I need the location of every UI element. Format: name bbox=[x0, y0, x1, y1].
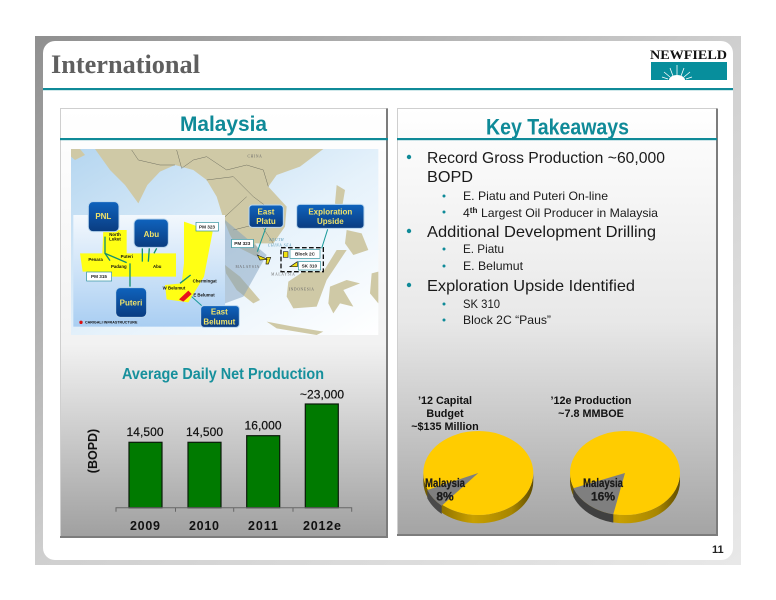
chart title: Average Daily Net Production bbox=[122, 366, 324, 383]
slice label: 8% bbox=[436, 490, 454, 504]
bars bbox=[129, 404, 338, 508]
callout buttons bbox=[88, 202, 364, 327]
block labels bbox=[87, 222, 321, 281]
bullet list: BOPD bbox=[427, 169, 473, 186]
pie title bbox=[550, 395, 632, 420]
inset map: Abu bbox=[153, 264, 162, 269]
inset map: Penara bbox=[88, 257, 103, 262]
map labels bbox=[236, 154, 315, 291]
bullet list: Block 2C “Paus” bbox=[463, 313, 551, 327]
pie chart: production bbox=[550, 395, 680, 523]
inset map: CARIGALI INFRASTRUCTURE bbox=[85, 320, 138, 324]
country borders bbox=[132, 150, 273, 243]
inset map: North bbox=[109, 232, 121, 237]
logo: Newfield: NEWFIELD bbox=[650, 48, 727, 62]
inset map: Chermingat bbox=[193, 279, 217, 284]
bullet list: th bbox=[470, 206, 478, 215]
axis label: (BOPD) bbox=[86, 429, 100, 473]
map: Southeast Asia assets: Abu bbox=[144, 230, 159, 239]
map: Southeast Asia assets: Upside bbox=[317, 217, 344, 226]
map: Southeast Asia assets: Belumut bbox=[203, 317, 236, 326]
bar chart: production bbox=[86, 388, 352, 533]
bullet list: Exploration Upside Identified bbox=[427, 278, 635, 295]
year labels: 2009 bbox=[130, 519, 160, 533]
bullet list: 4 bbox=[463, 206, 470, 220]
bullet list bbox=[407, 150, 665, 327]
year labels bbox=[130, 519, 341, 533]
pie title: Budget bbox=[426, 408, 464, 420]
bullet list: E. Belumut bbox=[463, 259, 524, 273]
block labels: PM 315 bbox=[91, 274, 107, 279]
map labels: INDONESIA bbox=[289, 287, 315, 291]
map: Southeast Asia assets: Exploration bbox=[308, 208, 352, 217]
year labels: 2012e bbox=[303, 519, 341, 533]
map labels: CHINA bbox=[248, 154, 262, 158]
inset map: W Belumut bbox=[163, 285, 186, 290]
panel: Malaysia bbox=[60, 108, 388, 537]
map: Southeast Asia assets: East bbox=[211, 308, 228, 317]
bullet list: Additional Development Drilling bbox=[427, 224, 656, 241]
slice label bbox=[425, 476, 465, 504]
block labels: PM 323 bbox=[234, 241, 251, 246]
heading: Key Takeaways: Key Takeaways bbox=[486, 114, 629, 140]
inset map: E Belumut bbox=[193, 292, 215, 297]
pie chart: capital budget bbox=[411, 395, 533, 523]
value labels: 16,000 bbox=[244, 418, 282, 432]
map: Southeast Asia assets bbox=[71, 149, 378, 335]
heading: Malaysia: Malaysia bbox=[180, 113, 267, 136]
right-hand assets bbox=[192, 227, 328, 306]
pie title: ~7.8 MMBOE bbox=[558, 408, 624, 420]
value labels: 14,500 bbox=[126, 425, 164, 439]
block labels: Block 2C bbox=[295, 252, 316, 257]
bullet list: Record Gross Production ~60,000 bbox=[427, 150, 665, 167]
header rule bbox=[43, 88, 733, 90]
year labels: 2010 bbox=[189, 519, 219, 533]
slice label: Malaysia bbox=[425, 476, 465, 490]
inset map: Lukut bbox=[109, 237, 121, 242]
bullet list: E. Piatu and Puteri On-line bbox=[463, 189, 608, 203]
value labels: ~23,000 bbox=[300, 388, 344, 402]
map: Southeast Asia assets: PNL bbox=[95, 212, 111, 221]
map: Southeast Asia assets: East bbox=[258, 208, 275, 217]
slice label: 16% bbox=[591, 490, 615, 504]
map: Southeast Asia assets: Platu bbox=[256, 217, 276, 226]
value labels: 14,500 bbox=[186, 425, 223, 439]
translucent zoom wedge bbox=[225, 220, 267, 303]
value labels bbox=[126, 388, 344, 439]
logo: Newfield bbox=[650, 48, 727, 80]
map labels: SOUTH bbox=[269, 238, 284, 242]
block labels: PM 323 bbox=[199, 224, 215, 229]
slice label bbox=[583, 476, 623, 504]
page number: 11 bbox=[712, 544, 724, 556]
map: Southeast Asia assets: Puteri bbox=[120, 298, 142, 307]
map labels: MALAYSIA bbox=[271, 272, 295, 276]
block labels: SK 310 bbox=[302, 263, 318, 268]
title: International bbox=[51, 50, 200, 79]
pie title: ’12 Capital bbox=[418, 395, 472, 407]
slice label: Malaysia bbox=[583, 476, 623, 490]
bullet list: SK 310 bbox=[463, 297, 500, 311]
bullet list: E. Piatu bbox=[463, 242, 504, 256]
pie title bbox=[411, 395, 479, 433]
pie title: ~$135 Million bbox=[411, 421, 479, 433]
year labels: 2011 bbox=[248, 519, 278, 533]
map labels: CHINA SEA bbox=[268, 243, 292, 247]
map labels: MALAYSIA bbox=[236, 265, 260, 269]
inset map bbox=[73, 215, 225, 327]
inset map: Padang bbox=[111, 264, 127, 269]
bullet list: Largest Oil Producer in Malaysia bbox=[478, 206, 658, 220]
land masses bbox=[71, 149, 378, 335]
panel: Key Takeaways bbox=[397, 108, 717, 535]
inset map: Puteri bbox=[121, 254, 133, 259]
pie title: ’12e Production bbox=[550, 395, 632, 407]
